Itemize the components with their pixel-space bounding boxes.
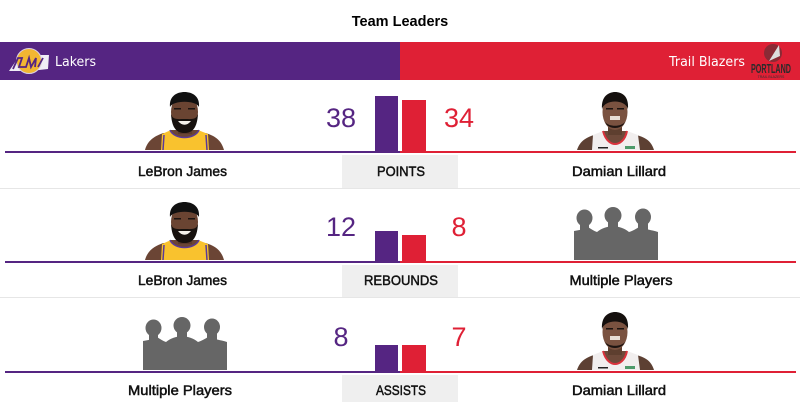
value: 38: 38 [326, 103, 356, 133]
value: 12: 12 [326, 212, 356, 242]
player: multiple players [143, 317, 227, 370]
name: Multiple Players: Multiple Players [570, 272, 672, 288]
title: Team Leaders [352, 14, 448, 30]
panel: rebounds row [5, 202, 796, 298]
player: Damian Lillard [577, 92, 654, 150]
category label: ASSISTS: ASSISTS [376, 382, 426, 398]
panel: Lakers header [0, 42, 400, 80]
player: Damian Lillard [577, 312, 654, 370]
bar chart: assists [5, 345, 796, 373]
category label: POINTS: POINTS [377, 163, 425, 179]
value: 7: 7 [451, 322, 467, 352]
name: Multiple Players: Multiple Players [128, 382, 232, 398]
panel: assists row [5, 312, 796, 402]
icon: Portland logo: TRAIL BLAZERS [758, 75, 785, 79]
value: 8: 8 [333, 322, 349, 352]
category label: REBOUNDS [342, 265, 458, 298]
icon: Lakers logo [9, 48, 49, 74]
panel: Lakers header: Lakers [55, 55, 96, 70]
name: Damian Lillard: Damian Lillard [572, 163, 666, 179]
panel: Trail Blazers header: Trail Blazers [668, 55, 745, 70]
panel: Trail Blazers header [400, 42, 800, 80]
player: LeBron James [145, 202, 224, 260]
bar chart: rebounds [5, 231, 796, 263]
icon: Portland logo [751, 44, 791, 79]
category label: REBOUNDS: REBOUNDS [364, 272, 438, 288]
player: multiple players [574, 207, 658, 260]
category label: ASSISTS [342, 375, 458, 402]
name: LeBron James: LeBron James [138, 272, 227, 288]
panel: points row [5, 92, 796, 188]
bar chart: points [5, 96, 796, 153]
value: 34: 34 [444, 103, 474, 133]
value: 8: 8 [451, 212, 467, 242]
player: LeBron James [145, 92, 224, 150]
name: Damian Lillard: Damian Lillard [572, 382, 666, 398]
category label: POINTS [342, 155, 458, 188]
name: LeBron James: LeBron James [138, 163, 227, 179]
